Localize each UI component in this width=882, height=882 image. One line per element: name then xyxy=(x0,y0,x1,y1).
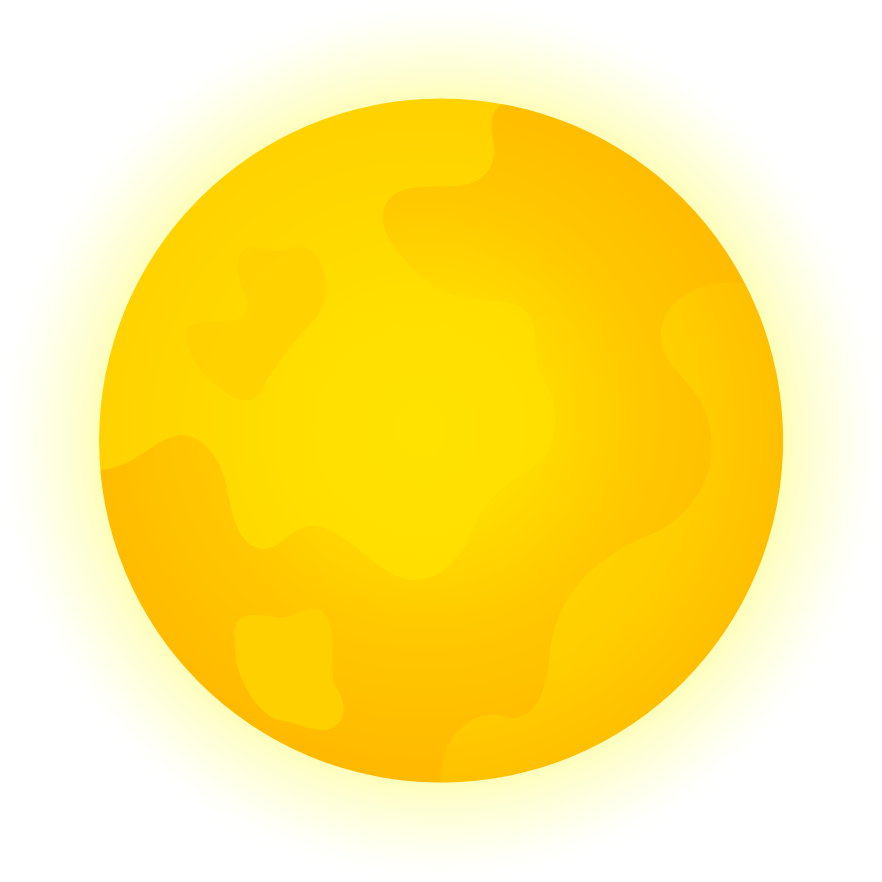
disc base xyxy=(99,98,783,782)
lower left spot xyxy=(234,608,344,730)
lighter region, right and bottom xyxy=(441,283,783,782)
sun disc xyxy=(99,98,783,782)
upper left spot xyxy=(218,261,326,400)
large darker region xyxy=(100,104,783,782)
